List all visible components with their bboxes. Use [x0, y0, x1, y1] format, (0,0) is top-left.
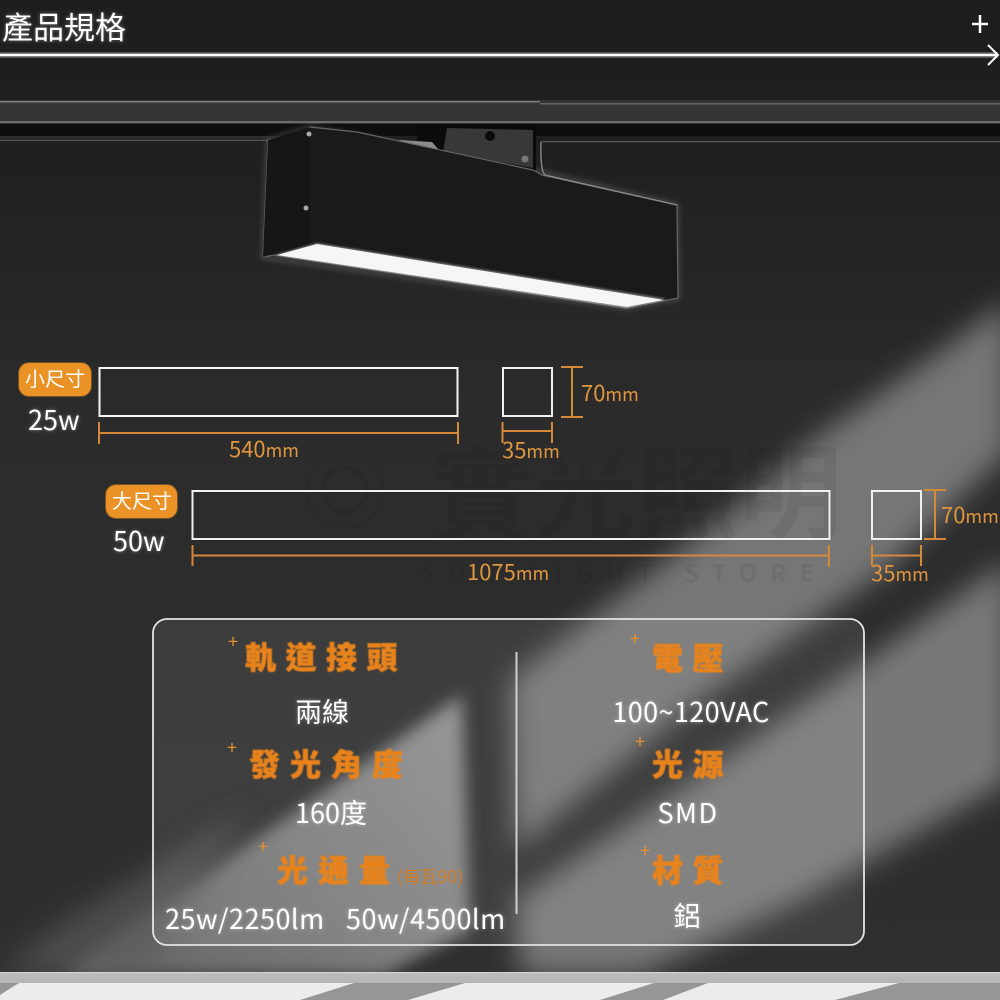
fixture halo: [263, 127, 678, 308]
track connector: 軌道接頭: [245, 633, 407, 678]
connector: [398, 124, 536, 172]
width label: 35mm: [502, 433, 560, 465]
height label: 70mm: [581, 376, 639, 408]
badge: 小尺寸: [25, 363, 85, 392]
front outline: [192, 491, 830, 539]
luminous flux: [165, 833, 506, 937]
ceiling track: [0, 100, 1000, 142]
large size spec: [106, 485, 999, 588]
side outline: [503, 368, 552, 416]
track connector: [228, 628, 407, 730]
watermark: SUN LIGHT STORE: [420, 554, 827, 589]
wattage: 50w: [113, 520, 165, 559]
width dimension: [502, 422, 552, 443]
width dimension: [872, 545, 921, 566]
title: 產品規格: [2, 3, 126, 48]
luminous flux: (每瓦90): [397, 864, 463, 889]
beam angle: 160度: [295, 792, 367, 831]
side outline: [872, 491, 921, 539]
front outline: [100, 368, 458, 416]
floor strip: [0, 972, 1000, 1000]
material: 材質: [652, 846, 733, 891]
luminous flux: 光通量: [277, 846, 400, 891]
voltage: +: [630, 625, 640, 651]
divider: [516, 652, 518, 914]
plus mark: [972, 15, 988, 33]
beam angle: +: [227, 734, 237, 760]
fixture body: [263, 127, 678, 308]
luminous flux: +: [258, 833, 268, 859]
screws: [306, 132, 312, 136]
small size spec: [19, 363, 639, 465]
light strip: [277, 244, 664, 307]
width label: 35mm: [871, 556, 929, 588]
badge: 大尺寸: [112, 485, 172, 514]
light streaks on wall: [0, 300, 1000, 975]
material: +: [640, 837, 650, 863]
length label: 540mm: [229, 432, 299, 464]
height label: 70mm: [941, 498, 999, 530]
track light fixture: [263, 124, 678, 308]
material: 鋁: [674, 895, 700, 934]
height dimension: [924, 490, 946, 539]
header arrow line: [0, 45, 998, 65]
luminous flux: 25w/2250lm: [165, 898, 325, 937]
material: [640, 837, 733, 934]
spec panel: [153, 619, 864, 945]
wattage: 25w: [28, 399, 80, 438]
light strip glow: [275, 243, 667, 308]
panel frame: [153, 619, 864, 945]
light source: SMD: [657, 792, 719, 831]
track connector: +: [228, 628, 238, 654]
length dimension: [99, 422, 458, 444]
beam angle: [227, 734, 413, 831]
light source: 光源: [652, 740, 733, 785]
light source: [635, 728, 733, 831]
luminous flux: 50w/4500lm: [346, 898, 506, 937]
watermark: [307, 411, 842, 589]
length dimension: [192, 545, 829, 567]
voltage: 電壓: [652, 634, 733, 679]
beam angle: 發光角度: [249, 740, 413, 785]
height dimension: [561, 367, 583, 417]
light source: +: [635, 728, 645, 754]
track connector: 兩線: [295, 691, 349, 730]
watermark: 實光照明: [430, 411, 842, 560]
length label: 1075mm: [467, 555, 549, 587]
outline right of connector: [541, 142, 677, 205]
voltage: 100~120VAC: [612, 691, 770, 730]
voltage: [612, 625, 770, 730]
